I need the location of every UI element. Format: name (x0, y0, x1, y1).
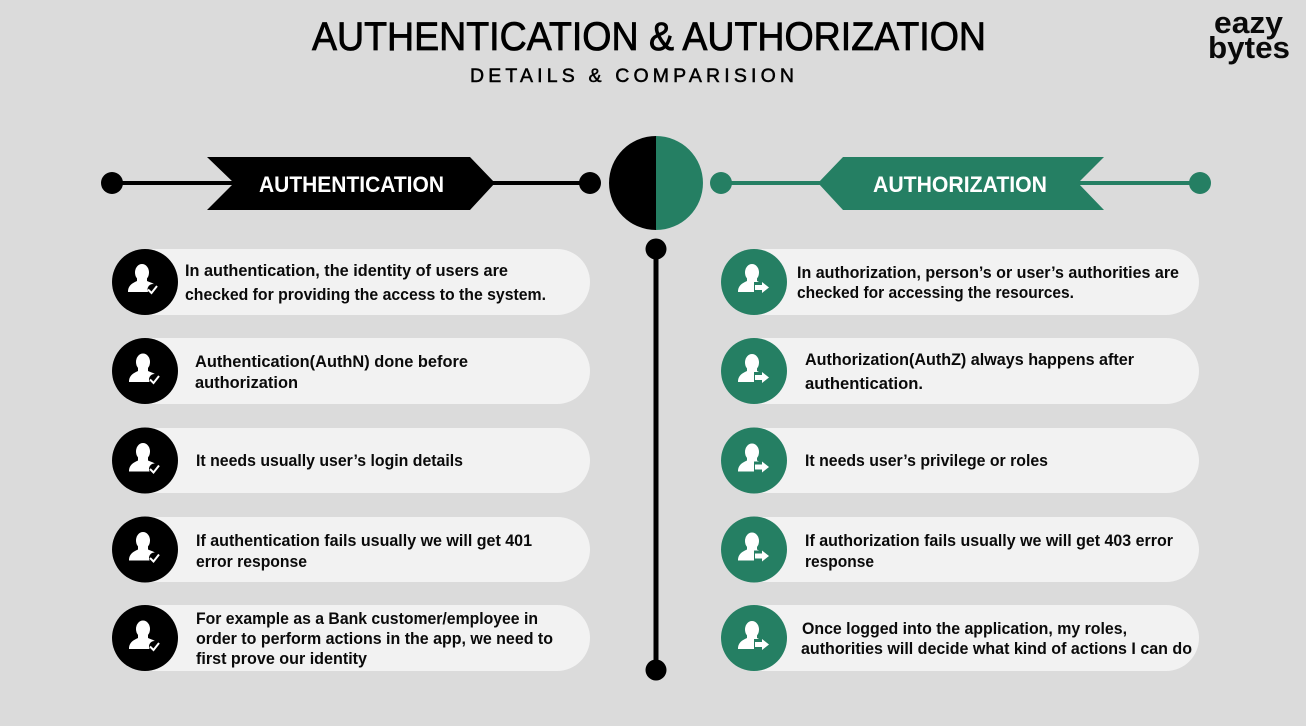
panel: authorization row 2 (721, 338, 1199, 404)
icon: user arrow (738, 444, 769, 472)
panel: authorization row 2: Authorization(AuthZ) always happens after (805, 351, 1135, 369)
panel: authorization row 1 (721, 249, 1199, 315)
logo: eazy bytes (1208, 5, 1290, 65)
panel: authentication row 2 (112, 338, 590, 404)
authentication banner: AUTHENTICATION (259, 172, 444, 197)
panel: authentication row 2: authorization (195, 374, 298, 392)
panel: authorization row 3: It needs user’s privilege or roles (805, 452, 1048, 470)
central split circle (609, 136, 703, 230)
panel: authentication row 4: error response (196, 553, 307, 571)
panel: authentication row 5: first prove our identity (196, 650, 368, 668)
panel: authentication row 2: Authentication(AuthN) done before (195, 353, 468, 371)
panel: authentication row 4 (112, 516, 590, 582)
panel: authorization row 5 (721, 605, 1199, 671)
panel: authorization row 5: authorities will decide what kind of actions I can do (801, 640, 1192, 658)
panel: authentication row 3: It needs usually user’s login details (196, 452, 463, 470)
panel: authentication row 1: In authentication, the identity of users are (185, 262, 508, 280)
panel: authorization row 3 (721, 428, 1199, 494)
panel: authorization row 4 (721, 516, 1199, 582)
icon: user check (129, 620, 160, 652)
icon: user check (129, 354, 160, 385)
subtitle: DETAILS & COMPARISION (470, 65, 794, 87)
icon: user arrow (738, 532, 769, 562)
title: AUTHENTICATION & AUTHORIZATION (312, 15, 986, 59)
panel: authorization row 4: response (805, 553, 874, 571)
icon: user arrow (738, 621, 769, 650)
panel: authentication row 3 (112, 428, 590, 494)
panel: authentication row 5: order to perform actions in the app, we need to (196, 630, 553, 648)
panel: authentication row 5: For example as a Bank customer/employee in (196, 610, 538, 628)
icon: user check (129, 532, 160, 564)
panel: authentication row 1: checked for providing the access to the system. (185, 286, 546, 304)
authentication banner (101, 157, 601, 210)
logo: eazy bytes: bytes (1208, 30, 1290, 65)
panel: authorization row 4: If authorization fails usually we will get 403 error (805, 532, 1174, 550)
icon: user arrow (738, 264, 769, 293)
panel: authorization row 1: checked for accessing the resources. (797, 284, 1074, 302)
authorization banner (710, 157, 1211, 210)
panel: authorization row 5: Once logged into the application, my roles, (802, 620, 1127, 638)
icon: user check (129, 443, 160, 474)
icon: user arrow (738, 354, 769, 383)
logo: eazy bytes: eazy (1214, 5, 1284, 40)
panel: authentication row 4: If authentication fails usually we will get 401 (196, 532, 532, 550)
authorization banner: AUTHORIZATION (873, 172, 1047, 197)
panel: authorization row 1: In authorization, person’s or user’s authorities are (797, 264, 1179, 282)
panel: authentication row 5 (112, 605, 590, 671)
panel: authorization row 2: authentication. (805, 375, 923, 393)
central vertical timeline (646, 238, 666, 680)
panel: authentication row 1 (112, 249, 590, 315)
icon: user check (128, 264, 158, 295)
